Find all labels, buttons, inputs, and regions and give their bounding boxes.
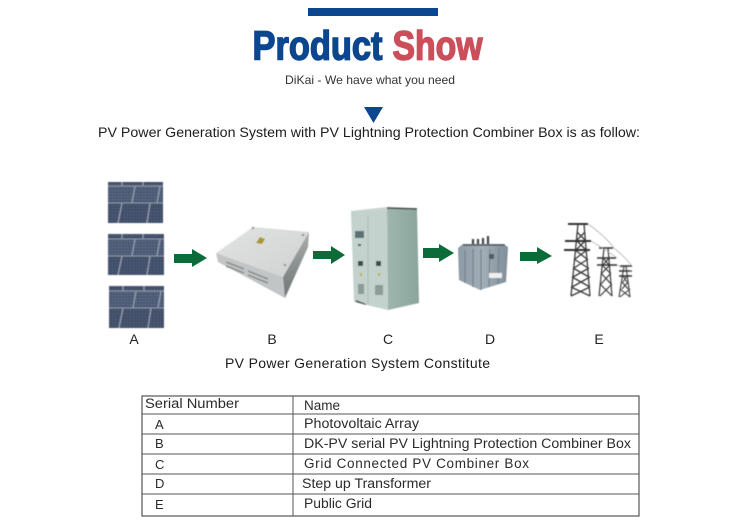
table name column: Public Grid	[304, 496, 372, 511]
table serial column: B	[155, 436, 164, 451]
diagram caption: PV Power Generation System Constitute	[225, 355, 490, 371]
table serial column	[155, 417, 164, 512]
tower 3	[619, 266, 632, 297]
table serial column: D	[155, 476, 164, 491]
table serial column: C	[155, 457, 164, 472]
diagram letter labels: B	[267, 331, 277, 347]
tower 2	[597, 248, 617, 296]
subtitle: DiKai - We have what you need	[285, 73, 455, 87]
diagram letter labels	[129, 331, 604, 347]
diagram letter labels: A	[129, 331, 139, 347]
arrow: C to D	[423, 244, 454, 262]
tower 1	[564, 224, 591, 296]
table header: Serial Number	[145, 396, 240, 411]
icon: down triangle	[364, 107, 383, 123]
solar panel 2	[108, 234, 164, 275]
solar panel 1	[108, 182, 163, 223]
table header	[145, 396, 340, 413]
table name column: Step up Transformer	[302, 476, 432, 491]
icon: power towers E	[564, 224, 632, 297]
icon: inverter cabinet C	[351, 207, 419, 310]
title: Product	[252, 22, 383, 68]
arrow: B to C	[313, 246, 345, 264]
diagram letter labels: D	[485, 331, 495, 347]
arrow: D to E	[520, 247, 552, 264]
table serial column: E	[155, 497, 164, 512]
top accent bar	[308, 8, 438, 16]
section heading: PV Power Generation System with PV Lightning Protection Combiner Box is as follow:	[98, 124, 640, 140]
table name column: Photovoltaic Array	[304, 416, 419, 431]
table header: Name	[304, 398, 340, 413]
arrow: A to B	[174, 249, 207, 267]
table name column: DK-PV serial PV Lightning Protection Combiner Box	[304, 436, 631, 451]
diagram letter labels: C	[383, 331, 393, 347]
table	[142, 396, 639, 516]
icon: transformer D	[458, 236, 508, 290]
table serial column: A	[155, 417, 164, 432]
diagram letter labels: E	[594, 331, 604, 347]
title: Show	[392, 22, 483, 68]
icon: solar panels A	[108, 182, 164, 328]
icon: combiner box B	[216, 227, 309, 298]
table name column: Grid Connected PV Combiner Box	[304, 456, 529, 471]
solar panel 3	[109, 286, 164, 328]
table name column	[302, 416, 631, 511]
power lines	[588, 224, 632, 271]
title	[252, 22, 483, 68]
